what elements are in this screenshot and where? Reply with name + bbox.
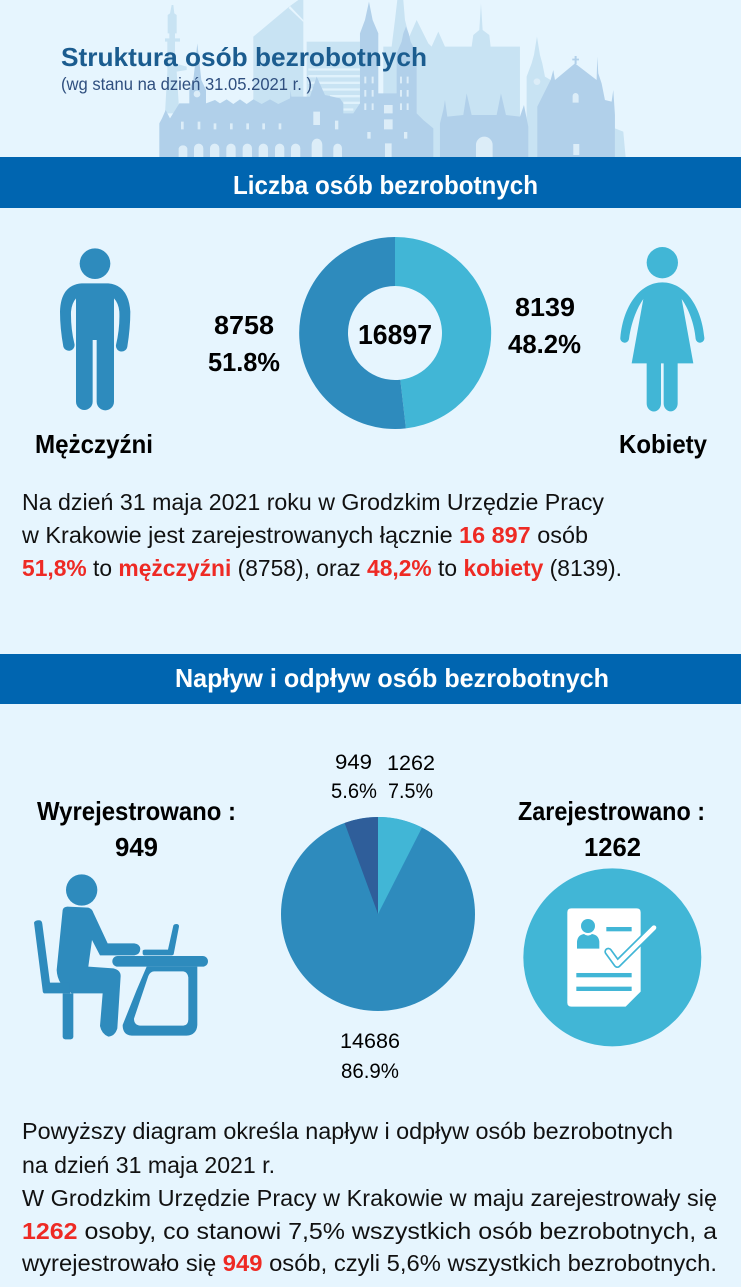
icon: registration document (523, 868, 701, 1046)
section header: inflow and outflow (0, 654, 741, 704)
label: deregistered: 949 (115, 832, 158, 862)
section header: number of unemployed (0, 157, 741, 208)
label: registered (518, 796, 705, 862)
title: Struktura osób bezrobotnych (61, 42, 427, 72)
subtitle: (wg stanu na dzień 31.05.2021 r. ) (61, 74, 312, 94)
pie labels: 86.9% (341, 1060, 399, 1083)
pie labels: 949 (335, 751, 372, 774)
women count: 48.2% (508, 329, 581, 359)
pie labels: 7.5% (388, 780, 433, 803)
men count: 8758 (214, 310, 274, 340)
label: men: Mężczyźni (35, 429, 153, 459)
women count: 8139 (515, 292, 575, 322)
label: deregistered: Wyrejestrowano : (37, 796, 236, 826)
text block: gender summary: Na dzień 31 maja 2021 roku w Grodzkim Urzędzie Pracy (22, 489, 604, 515)
women count (508, 292, 581, 359)
text block: inflow and outflow summary: 1262 osoby, co stanowi 7,5% wszystkich osób bezrobotnych, a (22, 1218, 718, 1244)
text block: gender summary (21, 489, 622, 581)
text block: inflow and outflow summary (21, 1118, 718, 1276)
text block: inflow and outflow summary: W Grodzkim Urzędzie Pracy w Krakowie w maju zarejestrowały się (22, 1185, 717, 1211)
icon: person at desk (34, 874, 208, 1039)
section header: inflow and outflow: Napływ i odpływ osób bezrobotnych (175, 663, 609, 693)
text block: inflow and outflow summary: Powyższy diagram określa napływ i odpływ osób bezrobotnych (22, 1118, 673, 1144)
text block: gender summary: w Krakowie jest zarejestrowanych łącznie 16 897 osób (21, 522, 588, 548)
pie labels: 14686 (340, 1030, 400, 1053)
skyline illustration (159, 0, 626, 157)
pie labels: 5.6% (331, 780, 377, 803)
icon: man (60, 248, 130, 410)
label: registered: Zarejestrowano : (518, 796, 705, 826)
section header: number of unemployed: Liczba osób bezrobotnych (233, 170, 538, 200)
pie labels: 1262 (387, 752, 435, 775)
pie chart (281, 817, 475, 1011)
donut chart: 16897 (358, 319, 432, 350)
text block: inflow and outflow summary: na dzień 31 maja 2021 r. (22, 1152, 275, 1178)
label: women: Kobiety (619, 429, 707, 459)
label: deregistered (37, 796, 236, 862)
pie labels (331, 751, 435, 1083)
men count (208, 310, 280, 377)
donut chart (299, 237, 491, 429)
men count: 51.8% (208, 347, 280, 377)
label: registered: 1262 (584, 832, 641, 862)
text block: inflow and outflow summary: wyrejestrowało się 949 osób, czyli 5,6% wszystkich bezrobotnych. (21, 1250, 717, 1276)
icon: woman (620, 247, 704, 412)
text block: gender summary: 51,8% to mężczyźni (8758), oraz 48,2% to kobiety (8139). (22, 555, 622, 581)
